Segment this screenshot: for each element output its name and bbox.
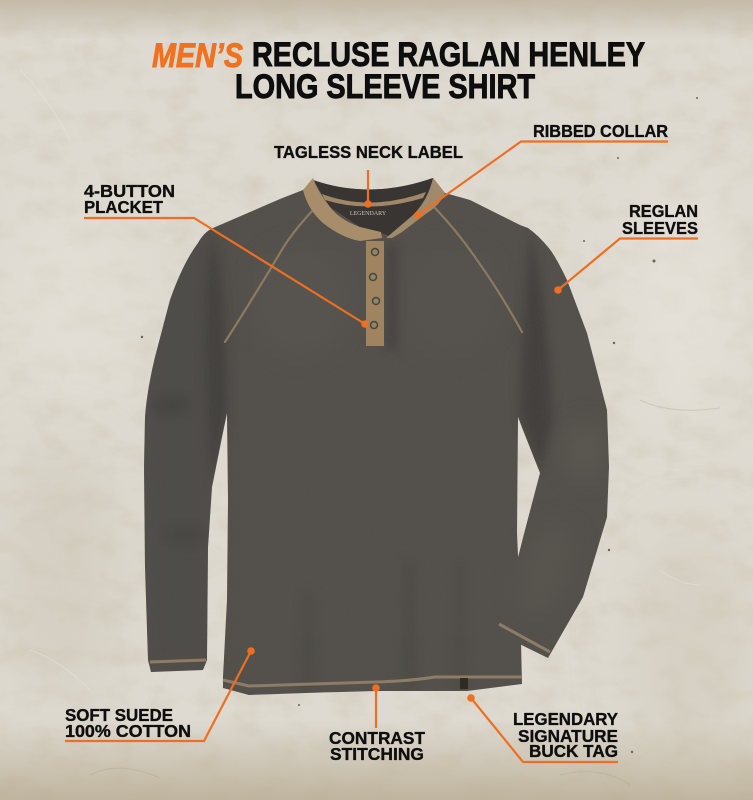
callout: reglan sleeves <box>554 201 698 294</box>
label text line 2: SIGNATURE <box>518 726 618 746</box>
label text line 2: PLACKET <box>84 197 163 217</box>
callout: soft suede cotton <box>65 647 255 741</box>
title <box>152 36 645 106</box>
collar left <box>303 178 382 241</box>
label text line 1: 4-BUTTON <box>84 181 175 201</box>
leader line <box>65 651 251 741</box>
leader line <box>558 238 698 290</box>
dot <box>467 694 475 702</box>
dot <box>361 320 369 328</box>
buttons <box>370 248 380 328</box>
title accent: men's: MEN’S <box>152 37 243 75</box>
label text: RIBBED COLLAR <box>533 121 668 141</box>
raglan seams <box>225 208 522 342</box>
label text: TAGLESS NECK LABEL <box>274 142 463 162</box>
callout: tagless neck label <box>274 142 463 208</box>
neck label text: LEGENDARY <box>350 211 387 217</box>
dot <box>364 200 372 208</box>
callout: contrast stitching <box>329 684 425 764</box>
callout: ribbed collar <box>414 121 668 219</box>
label text line 2: 100% COTTON <box>65 721 191 741</box>
label text line 1: LEGENDARY <box>513 709 618 729</box>
neck interior <box>313 178 433 236</box>
leader line <box>367 170 369 204</box>
leader line <box>418 142 668 215</box>
hem and cuff stitching <box>150 624 550 686</box>
collar right <box>386 178 445 238</box>
back neck band <box>322 192 426 207</box>
shirt shading <box>130 170 630 710</box>
label text line 3: BUCK TAG <box>529 741 618 761</box>
callout: legendary signature buck tag <box>467 694 618 762</box>
buck tag <box>460 678 468 689</box>
placket <box>366 241 384 346</box>
label text line 2: STITCHING <box>330 744 424 764</box>
shirt <box>144 178 609 695</box>
title line 2: LONG SLEEVE SHIRT <box>235 68 535 106</box>
label text line 1: SOFT SUEDE <box>65 705 173 725</box>
leader line <box>375 688 377 728</box>
label text line 1: REGLAN <box>629 201 698 221</box>
label text line 1: CONTRAST <box>329 728 425 748</box>
callout: 4-button placket <box>84 181 369 328</box>
leader line <box>84 218 365 324</box>
label text line 2: SLEEVES <box>622 218 698 238</box>
dot <box>414 211 422 219</box>
dot <box>247 647 255 655</box>
dot <box>372 684 380 692</box>
leader line <box>471 698 618 762</box>
title line 1: RECLUSE RAGLAN HENLEY <box>252 36 645 74</box>
dot <box>554 286 562 294</box>
shirt base shape <box>144 178 609 695</box>
